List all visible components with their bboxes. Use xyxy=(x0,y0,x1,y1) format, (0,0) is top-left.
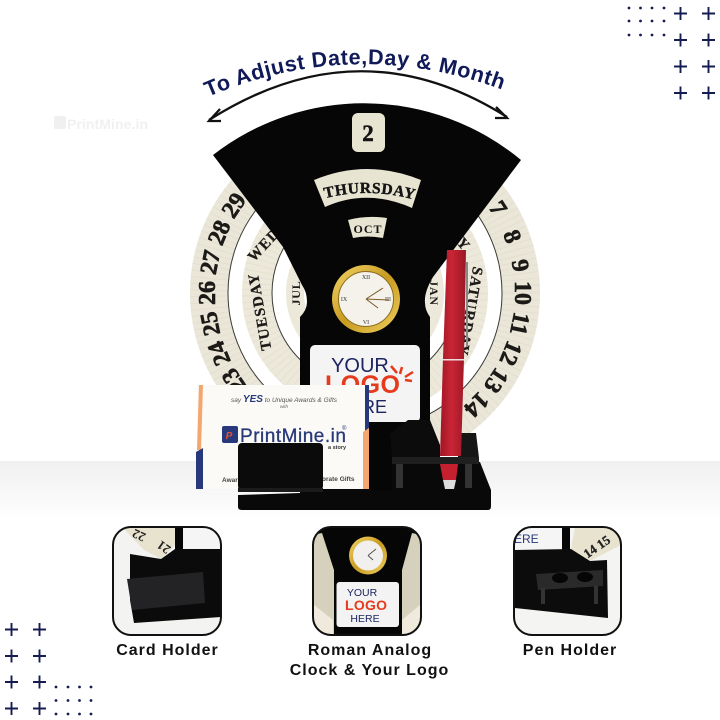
watermark logo: PrintMine.in xyxy=(67,116,148,132)
business card xyxy=(196,385,369,489)
outer date ring: 8 xyxy=(497,226,526,247)
base plate xyxy=(238,462,491,510)
analog clock xyxy=(332,265,400,333)
business card: say YES to Unique Awards & Gifts xyxy=(231,394,338,405)
business card: P xyxy=(226,431,233,442)
middle day ring: FRIDAY xyxy=(419,195,473,255)
thumbnail: clock and logo: HERE xyxy=(350,613,380,625)
your logo card: HERE xyxy=(337,397,387,417)
thumbnail: card holder xyxy=(113,526,221,635)
thumbnail: clock and logo xyxy=(313,527,421,635)
day window xyxy=(314,169,421,208)
thumbnail: card holder: 21 xyxy=(154,538,173,557)
curved title: To Adjust Date,Day & Month xyxy=(202,49,504,95)
curved double arrow xyxy=(209,71,507,121)
middle day ring: SATURDAY xyxy=(454,265,485,357)
day window: THURSDAY xyxy=(322,182,416,199)
decoration: top right plus signs and dots xyxy=(628,7,715,100)
calendar wheels xyxy=(195,137,535,449)
business card: a story xyxy=(328,445,347,451)
your logo card: LOGO xyxy=(325,371,400,399)
thumbnail: card holder: 22 xyxy=(130,526,148,545)
outer date ring: 24 xyxy=(203,337,237,369)
your logo card xyxy=(310,345,420,422)
date window: 2 xyxy=(362,121,374,146)
outer date ring: 23 xyxy=(217,363,252,397)
outer date ring: 26 xyxy=(195,281,221,305)
outer date ring: 13 xyxy=(478,363,513,397)
outer date ring: 10 xyxy=(509,281,535,305)
month window xyxy=(348,217,387,238)
outer date ring: 9 xyxy=(506,258,533,274)
outer date ring: 11 xyxy=(504,310,534,337)
caption: roman analog clock and logo: Roman Analog xyxy=(308,642,432,659)
card holder xyxy=(238,443,323,492)
thumbnail: pen holder xyxy=(514,527,621,635)
outer date ring: 27 xyxy=(196,248,226,277)
red pen xyxy=(440,250,468,489)
black acrylic fan body xyxy=(213,103,521,492)
caption: card holder: Card Holder xyxy=(116,642,219,659)
analog clock: XII xyxy=(362,275,370,281)
business card: orate Gifts xyxy=(322,476,355,483)
floor background xyxy=(0,461,720,521)
middle day ring xyxy=(245,176,485,401)
outer date ring: 12 xyxy=(493,337,527,369)
your logo card: YOUR xyxy=(331,355,389,377)
date window xyxy=(352,113,385,152)
inner month ring xyxy=(289,223,441,363)
middle day ring: TUESDAY xyxy=(246,271,275,352)
decoration: bottom left plus signs and dots xyxy=(5,623,92,715)
inner month ring: JAN xyxy=(427,280,441,306)
pen holder xyxy=(390,420,479,488)
outer date ring: 28 xyxy=(203,217,237,249)
inner month ring: JUL xyxy=(289,280,303,306)
thumbnail: clock and logo: LOGO xyxy=(345,597,387,613)
business card: with xyxy=(280,404,288,409)
analog clock: IX xyxy=(341,297,348,303)
thumbnail: pen holder: 14 15 xyxy=(580,532,613,561)
outer date ring xyxy=(195,137,535,449)
thumbnail: pen holder: ERE xyxy=(514,532,539,546)
outer date ring: 7 xyxy=(483,197,512,221)
business card: ® xyxy=(342,425,347,432)
thumbnail: clock and logo: YOUR xyxy=(347,587,378,599)
analog clock: VI xyxy=(363,320,369,326)
month window: OCT xyxy=(353,222,383,236)
middle day ring: WEDNESDAY xyxy=(245,176,330,265)
caption: roman analog clock and logo: Clock & Your Logo xyxy=(290,662,449,679)
outer date ring: 25 xyxy=(196,309,226,338)
caption: pen holder: Pen Holder xyxy=(523,642,617,659)
outer date ring: 14 xyxy=(458,386,494,422)
outer date ring: 29 xyxy=(217,189,252,223)
business card: PrintMine.in xyxy=(240,426,346,447)
business card: Awards xyxy=(222,477,246,484)
analog clock: III xyxy=(385,297,391,303)
